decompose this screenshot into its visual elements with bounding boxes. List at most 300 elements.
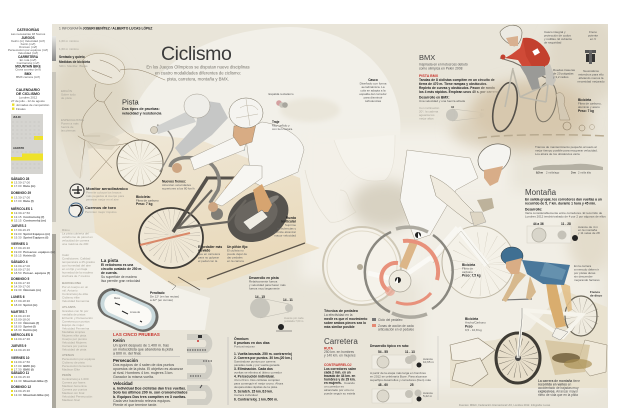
BMX text: tierra de 470 m. Tiene rampas y obstáculos.: [419, 82, 487, 86]
horns text: [85, 205, 117, 214]
Carretera section: y 140 km. en mujeres: [324, 354, 356, 358]
sidebar: categories: Contrarreloj (m/f): [17, 61, 39, 65]
Montaña section: Londres 2012 tendrá trabado de 4 por 2 por algunos de ellos: [525, 214, 606, 218]
history notes: Por el cuerpo en un: [62, 285, 89, 289]
history notes: Contrarreloj de élite: [62, 292, 89, 296]
mountain annotations: mejorando factores: [574, 278, 600, 282]
helmet note: Espalda recta/arco: [268, 92, 294, 96]
history notes: Velocidad de pista: [62, 348, 87, 352]
left side notes: las piernas: [61, 128, 76, 132]
track bike annotations: puede dejar de: [227, 252, 247, 256]
five events: a. Individual Dos ciclistas dan tres vueltas.: [113, 386, 186, 390]
history notes: mil. Antonio: [62, 288, 78, 292]
pedaling legend: Zonas de acción de cada: [378, 324, 414, 328]
Carretera section: [324, 337, 358, 396]
sidebar: schedule: 13.30-17.00: [14, 180, 30, 184]
route profile: 3 m: [571, 170, 576, 174]
Montaña section: Desarrollo:: [525, 208, 542, 212]
helmet note Casco: Casco: [368, 78, 378, 82]
sidebar: schedule: 18.00 Sprint (f): [14, 324, 36, 328]
helmet note Casco: para disminuir: [364, 96, 382, 100]
track bike annotations: para no golpear: [198, 256, 219, 260]
BMX annotations: necesidad mejorado: [577, 80, 605, 84]
left side notes: Medidas de bicicleta: [59, 60, 90, 64]
Montaña section: y 11 velas de 28: [578, 231, 600, 235]
history notes: temperatura a 25 grados: [62, 260, 95, 264]
history notes: medalla de pistas: [62, 312, 86, 316]
Carretera section: trazado de 44 km. en: [324, 374, 355, 378]
BMX text: aguanta los: [419, 113, 435, 117]
BMX rider: [488, 25, 559, 134]
omnium column: Puntos/mejoran: [234, 344, 255, 348]
gear notes right: [410, 354, 434, 398]
Montaña section: recorrido de 5, 7 km. durante 1 hora y 45 min.: [525, 202, 596, 206]
route profile: mejor tiempo posible para recuperar velocidad.: [535, 148, 598, 152]
track bike annotations: El pedalier más: [198, 245, 222, 249]
sidebar: categories: CARRETERA: [18, 55, 39, 59]
history notes: Velocidad Persecución: [62, 394, 93, 398]
Montaña section: Montaña: [525, 188, 557, 197]
mountain note: [538, 379, 580, 397]
BMX text: mejor altos: [419, 116, 434, 120]
Montaña section: Varía considerablemente entre corredores. El recorrido de: [525, 211, 602, 215]
sidebar: schedule: 17.00-19.30: [14, 246, 30, 250]
sidebar: categories: En ruta (m/f): [20, 58, 36, 62]
sidebar: schedule: 19.00 Sprint Equipos (m): [14, 232, 50, 236]
gear notes right: 5,22 m: [423, 394, 433, 398]
Carretera section: un corredor es: [324, 384, 344, 388]
sidebar: categories: Keirin (m/f): [21, 42, 35, 46]
intro text: pista, carretera, montaña y BMX.: [167, 76, 229, 82]
track bike annotations: Alcanzan velocidades: [162, 183, 192, 187]
mountain note: ritmo de vida que en la pista: [538, 393, 578, 397]
mountain annotations: 9,5 - 10,8 kg: [465, 328, 482, 332]
left side notes: ESPECIALISTAS: [61, 118, 84, 122]
sidebar: schedule: 15.15 Contrarreloj (m): [14, 218, 46, 222]
sidebar: schedule: 13.00-16.30: [14, 348, 30, 352]
sidebar: schedule: JUEVES 2: [11, 224, 26, 228]
omnium column: 4 km./3 km. Dos ciclistas compiten: [234, 378, 280, 382]
pedaling legend: articulación en el pedaleo: [378, 328, 414, 332]
omnium column: [228, 336, 292, 405]
history notes: Cuerpo por puntos: [62, 337, 87, 341]
five events: LAS CINCO PRUEBAS: [113, 332, 160, 337]
source line: Fuentes: RFEC, Federación Internacional UCI, Londres 2012. Infografía: Lucas: [459, 403, 551, 407]
BMX text: Inspirada en el motocross debutó: [419, 62, 468, 66]
sidebar: schedule: 13.30 Mountain Bike (f): [14, 379, 48, 383]
history notes: Ritmo: [62, 228, 70, 232]
Pista heading: Dos tipos de pruebas:: [122, 107, 160, 111]
five events: [113, 332, 210, 407]
omnium column: 6. Contrarreloj. 1 km./500 m.: [234, 398, 278, 402]
BMX text: Tandas de 8 ciclistas compiten en un circuito de: [419, 78, 495, 82]
mountain note: La carrera de montaña tiene: [538, 379, 580, 383]
rocks: [450, 290, 607, 388]
five events: al rival. Hombres 4 km. mujeres 3 km.: [113, 371, 173, 375]
monitor text: más pegados al cuerpo para: [86, 194, 124, 198]
BMX annotations: Ruedas traseras: [553, 68, 576, 72]
monitor text: Permite colocar los brazos: [86, 190, 122, 194]
five events: Velocidad: [113, 381, 133, 386]
road gearing: [370, 336, 438, 403]
desarrollo en pista: 14 - 15: [255, 295, 265, 299]
history notes: Ciclismo élite: [62, 296, 80, 300]
history notes: Velocidad Femenina: [62, 299, 90, 303]
left side notes: [59, 39, 90, 132]
road bike label: Peso: 7,5 kg: [462, 274, 481, 278]
BMX annotations: Neumáticos: [583, 69, 599, 73]
road bike label: carbono: [462, 270, 473, 274]
sidebar: calendar heading: CALENDARIO: [16, 88, 40, 92]
desarrollo en pista: Desarrollo en pista: [249, 276, 279, 280]
track bike annotations: Rueda: [286, 216, 296, 220]
gear notes right: Avance: [423, 357, 433, 361]
history notes: Calor: [62, 253, 69, 257]
sidebar: schedule: 13.30 Mountain Bike (m): [14, 393, 49, 397]
intro text: en cuatro modalidades diferentes de ciclismo:: [155, 70, 241, 76]
BMX text: Una velocidad y una fuerza alzada: [419, 99, 465, 103]
track bike annotations: Un piñón fijo:: [227, 245, 248, 249]
sidebar: schedule: 13.30-17.50: [14, 211, 30, 215]
La pista text: [101, 258, 142, 283]
Carretera section: en mujeres.: [324, 381, 342, 385]
BMX annotations: Bicicleta: [578, 98, 591, 102]
Carretera section: cada 2 min. en un: [324, 370, 351, 374]
BMX text: 16: [481, 108, 484, 112]
track bike annotations: Suprime: [285, 223, 296, 227]
history notes: humedad de la madera: [62, 270, 93, 274]
road gearing: 54 - 55: [378, 350, 388, 354]
BMX group small: [478, 93, 606, 138]
history notes: Grandes con fin por: [62, 309, 88, 313]
BMX annotations: Fibra de carbono,: [578, 102, 602, 106]
left side notes: 1,60 m mínimo: [59, 39, 79, 43]
Montaña section: en la montaña: [578, 228, 597, 232]
BMX text: 20°, la cadena: [419, 110, 439, 114]
track bike annotations: el pedal con la: [198, 259, 218, 263]
La pista text: Su superficie de madera: [101, 275, 137, 279]
BMX annotations: aluminio y acero: [578, 105, 600, 109]
sidebar: schedule: 13.30-17.00: [14, 196, 30, 200]
helmet note Casco: [359, 78, 387, 103]
track bike annotations: en la carrera: [227, 259, 244, 263]
sidebar: calendar heading: 27 de julio - 12 de agosto: [11, 99, 45, 103]
La pista text: La pista: [101, 258, 119, 263]
left side notes: ERGÓN: [61, 88, 72, 93]
BMX text: 44: [451, 105, 454, 109]
BMX text: PISTA BMX: [419, 74, 439, 78]
velodrome diagram: Línea de: [130, 310, 141, 314]
icon: aero monitor: [70, 184, 84, 198]
road gearing: 25: [410, 383, 414, 387]
BMX text: BMX: [419, 53, 435, 62]
desarrollo en pista: fuerza muy largamente: [249, 286, 280, 290]
faded background face: [305, 135, 395, 222]
five events: opuestos de la pista. El objetivo es alcanzar: [113, 367, 184, 371]
history notes: Mujeres elite pista: [62, 334, 87, 338]
omnium column: vueltas se elimina al último corredor: [234, 370, 282, 374]
BMX annotations: potente: [588, 34, 598, 38]
five events: Pierde el que termine tarde.: [113, 403, 157, 407]
track bike annotations: El ciclista no: [227, 248, 244, 252]
road gearing: A partir de la etapa más larga en hombres: [370, 371, 426, 375]
monitor text: Monitor aerodinámico: [86, 186, 128, 191]
left side notes: fuerza de: [61, 125, 74, 129]
sidebar: calendar grid: [11, 114, 43, 174]
track bike annotations: mayor velocidad: [274, 234, 296, 238]
history notes: velódromo de pared en: [62, 235, 93, 239]
history notes: [62, 228, 96, 402]
jersey callout text: con tiel costura.: [272, 127, 293, 131]
sketch rider, top left: [60, 53, 165, 180]
title: Ciclismo: [161, 43, 232, 65]
pedaling legend: Ciclo del pedaleo: [378, 318, 403, 322]
sidebar: schedule: 17.00 Ruta (m): [14, 184, 35, 188]
Carretera section: alcanzado por otro no: [324, 388, 354, 392]
sidebar: schedule: 13.15 Contrarreloj (f): [14, 215, 44, 219]
desarrollo en pista: y velocidad para hacer más: [249, 283, 286, 287]
sidebar: schedule: MARTES 7: [11, 310, 27, 314]
helmet note: [268, 92, 294, 108]
history notes: PEKÍN: [62, 372, 71, 377]
La pista text: de cuerda.: [101, 271, 118, 275]
history notes: Madison sin final: [62, 391, 85, 395]
sidebar: schedule: 13.00-17.30: [14, 281, 30, 285]
omnium column: 1. Vuelta lanzada. 250 m. contrarreloj: [234, 352, 292, 356]
pedaling legend: [372, 318, 414, 332]
omnium column: Ómnium: [234, 336, 249, 341]
sidebar: schedule: LUNES 6: [11, 295, 25, 299]
sidebar: schedule: VIERNES 10: [11, 356, 30, 360]
five events: Keirin: [113, 338, 125, 343]
track bike front: [139, 158, 246, 268]
La pista text: circuito ovalado de 250 m.: [101, 267, 142, 271]
sidebar: schedule: DOMINGO 12: [11, 385, 31, 389]
BMX text: Repleto de curvas y obstáculos. Pasan de ronda: [419, 86, 495, 90]
desarrollo en pista: Avance por cada: [284, 316, 304, 320]
helmet note Casco: Diseñado con forma: [360, 82, 387, 86]
sidebar: schedule: 19.30 Ómnium (m): [14, 287, 41, 292]
sidebar: schedule: DOMINGO 5: [11, 277, 29, 281]
history notes: Carrera por fases: [62, 380, 86, 384]
history notes: ATENAS: [62, 353, 74, 357]
sidebar: calendar grid: JULIO: [13, 115, 21, 119]
sidebar: schedule: 17.00 Ómnium (f): [14, 320, 39, 325]
sidebar: schedule: SÁBADO 11: [11, 370, 29, 375]
mountain note: recorrido en varios en: [538, 382, 572, 386]
La pista text: El velódromo es una: [101, 263, 133, 267]
velodrome diagram: Meta: [114, 296, 120, 300]
road bike label: Fibra de: [462, 266, 473, 270]
sidebar: schedule: 19.15 Keirin (f): [14, 254, 36, 258]
history notes: Persecución femenina: [62, 364, 92, 368]
Montaña section: Avance de 4 m: [578, 225, 598, 229]
sidebar: schedule: 13.00-15.30: [14, 389, 30, 393]
road gearing: en 2012 se celebraría Boxe. Para alcanzar: [370, 374, 427, 378]
sidebar: schedule: 17.00 BMX (m): [14, 364, 35, 368]
omnium column: para conseguir el mejor crono. Ahora: [234, 382, 284, 386]
track bike annotations: Nuevos frenos:: [162, 180, 186, 184]
five events: b. Equipos Dos tres compiten en 3 vueltas.: [113, 395, 186, 399]
BMX annotations: Peso: 7 kg: [578, 109, 594, 113]
second rider, grey jersey: [117, 94, 228, 186]
sidebar: schedule: 14.30-17.00: [14, 284, 30, 288]
Montaña section: En salida grupal, los corredores dan vueltas a un: [525, 198, 602, 202]
mountain annotations: En la carrera: [574, 264, 592, 268]
Carretera section: Cuando: [344, 381, 355, 385]
omnium column: paradas cada y por vuelta ganada: [234, 363, 280, 367]
BMX text: Con inclinación: [419, 106, 440, 110]
mountain annotations: de disco: [590, 294, 602, 298]
sidebar: schedule: VIERNES 3: [11, 242, 28, 246]
sidebar: categories: BMX carrera (m/f): [16, 75, 40, 79]
gear notes right: Avance: [423, 391, 433, 395]
sidebar: categories: Cross country (m/f): [15, 68, 41, 72]
left side notes: Sentado y quieto: [59, 55, 85, 59]
BMX annotations: en V: [590, 37, 596, 41]
intro text: [146, 64, 250, 82]
history notes: Contrarreloj a 1.000: [62, 377, 89, 381]
side tabs: [52, 36, 56, 408]
sidebar: categories: [8, 27, 48, 79]
pedaling technique: medir es que el movimiento: [324, 317, 367, 321]
route profile: [533, 145, 603, 174]
history notes: La pista cubierta del: [62, 232, 89, 236]
sidebar: categories: CATEGORÍAS: [17, 27, 40, 32]
sidebar: categories: Las necesarias 18 Somos: [11, 32, 46, 36]
five events: Un sprint después de 1.400 m. tras: [113, 344, 169, 348]
sidebar: schedule: 18.50 Persec. equipos (f): [14, 271, 50, 275]
mountain bike front wheel: [496, 333, 540, 383]
omnium column: desparecidas rápidas de la pista.: [234, 385, 278, 389]
omnium column: 2. Carrera por puntos. 30 km.(20 km.): [234, 356, 292, 360]
BMX dust: [470, 80, 590, 144]
Carretera section: RUTA: [324, 346, 334, 350]
history notes: Persecución por equipos: [62, 357, 96, 361]
track bike annotations: que en carretera: [198, 252, 220, 256]
sidebar: schedule: JUEVES 9: [11, 344, 26, 348]
history notes: Madison Elite: [62, 368, 80, 372]
intro text: En los Juegos Olímpicos se disputan nueve disciplinas: [146, 64, 250, 70]
BMX annotations: de seguridad: [544, 40, 562, 44]
BMX text: [419, 53, 498, 121]
rear disc wheel: [218, 180, 298, 252]
history notes: Madison femenina: [62, 384, 87, 388]
road gearing: Desarrollo típico en ruta:: [370, 344, 409, 348]
BMX text: Desarrollo en BMX:: [419, 96, 449, 100]
desarrollo en pista: 14 - 11: [283, 298, 293, 302]
BMX annotations: Casco integral y: [544, 30, 566, 34]
history notes: Equipo de mujer: [62, 323, 84, 327]
route profile: 2 m/ds/ago: [546, 170, 560, 174]
main rider, white jersey: [172, 98, 304, 230]
sidebar: calendar heading: [11, 88, 50, 111]
sidebar: calendar heading: Londres 2012: [19, 96, 38, 100]
mountain annotations: sin descender: [574, 274, 593, 278]
sidebar: schedule: 18.30 Keirin (m): [14, 328, 37, 332]
BMX annotations: protección de codos: [544, 34, 571, 38]
history notes: Carrera por puntos: [62, 388, 88, 392]
Carretera section: Carretera: [324, 337, 358, 346]
sidebar: schedule: 19.00 Persecuc. equipos (m): [14, 250, 55, 254]
pedaling technique: [324, 309, 367, 329]
sidebar: categories: BMX: [24, 72, 32, 76]
monitor text: penetrar mejor en el aire: [86, 198, 119, 202]
sidebar: schedule: 19.30 Sprint Equipos (f): [14, 236, 48, 240]
track bike annotations: permite alcanzar: [274, 230, 296, 234]
mountain annotations: por pistas duras: [574, 271, 596, 275]
track bike annotations: Peso: 7 kg: [136, 202, 152, 206]
five events: Cada vez haciendo relevos equipos.: [113, 399, 171, 403]
left side notes: de pista: [61, 96, 72, 100]
history notes: Velocidad Mujeres: [62, 340, 87, 344]
helmet note Casco: aerodinámica. La: [361, 85, 385, 89]
sidebar: calendar heading: Finales: [16, 107, 26, 111]
banking note: Peraltado: [150, 291, 165, 295]
credits line: 1 INFOGRAFÍA JOSERI BENÍTEZ / ALBERTO LUCAS LÓPEZ: [59, 26, 152, 30]
track bike annotations: dar pedales: [227, 256, 243, 260]
history notes: una máxima de 200: [62, 242, 89, 246]
Montaña section: [525, 188, 606, 243]
pedaling technique: más similar posible: [324, 325, 355, 329]
BMX annotations: y 3,2 radios: [553, 75, 569, 79]
history notes: Ciclismo de pista: [62, 360, 85, 364]
track bike annotations: Fibra de carbono: [136, 198, 159, 202]
helmet note Casco: turbulencias: [365, 99, 382, 103]
pedaling technique: sobre ambos pieces sea lo: [324, 321, 366, 325]
history notes: en un fijo y en baja: [62, 267, 88, 271]
Montaña section: 11 - 28: [561, 222, 571, 226]
BMX annotations: Freno: [589, 30, 597, 34]
Pista heading: [122, 98, 162, 116]
helmet note Casco: cola se adapta a la: [360, 88, 386, 92]
BMX text: los 4 más rápidos. Emplean unos 40 s. por carrera: [419, 90, 498, 94]
track bike annotations: superiores a los 80 km/h: [162, 186, 195, 190]
sidebar: schedule: 13.00-18.00: [14, 318, 30, 322]
history notes: BARCELONA: [62, 281, 82, 285]
track bike annotations: elevado: [198, 248, 210, 252]
history notes: Medallas simples: [62, 330, 86, 334]
omnium column: Carrera individual: [234, 393, 258, 397]
sidebar: categories: Persecución por equipos (m/f): [8, 48, 48, 52]
left side notes: 1,60 m mínimo: [59, 47, 79, 51]
BMX annotations: aliviando menos la: [579, 76, 604, 80]
history notes: con humedad del aire: [62, 264, 91, 268]
track bike annotations: [136, 180, 297, 263]
Carretera section: hombres y de 29 km.: [324, 378, 356, 382]
Pista heading: Pista: [122, 98, 140, 106]
sidebar: schedule: MIÉRCOLES 8: [11, 332, 33, 337]
left side notes: Ponen a más: [61, 122, 79, 126]
road bike label: [462, 263, 481, 278]
sidebar: schedule: 17.00-19.15: [14, 228, 30, 232]
history notes: velocidad de carrera: [62, 238, 90, 242]
sidebar: categories: JUEGOS: [21, 36, 35, 40]
sidebar: schedule: 18.00 Sprint (m): [14, 303, 37, 307]
sidebar: schedule: DOMINGO 29: [11, 191, 31, 195]
Carretera section: CONTRARRELOJ: [324, 363, 352, 367]
jersey callout text: Muy ceñido y: [272, 124, 290, 128]
Carretera section: Los corredores salen: [324, 367, 356, 371]
BMX annotations: [544, 30, 605, 113]
horns text: Cuernos de toro: [85, 205, 116, 210]
sidebar: calendar heading: Jornadas de competición: [16, 103, 50, 107]
BMX text: como olímpica en Pekín 2008: [419, 66, 463, 70]
banking note: [150, 281, 179, 302]
icon: bull horns: [69, 203, 83, 217]
track bike annotations: lenticular: [281, 220, 297, 224]
five events: a 600 m. del final.: [113, 352, 141, 356]
